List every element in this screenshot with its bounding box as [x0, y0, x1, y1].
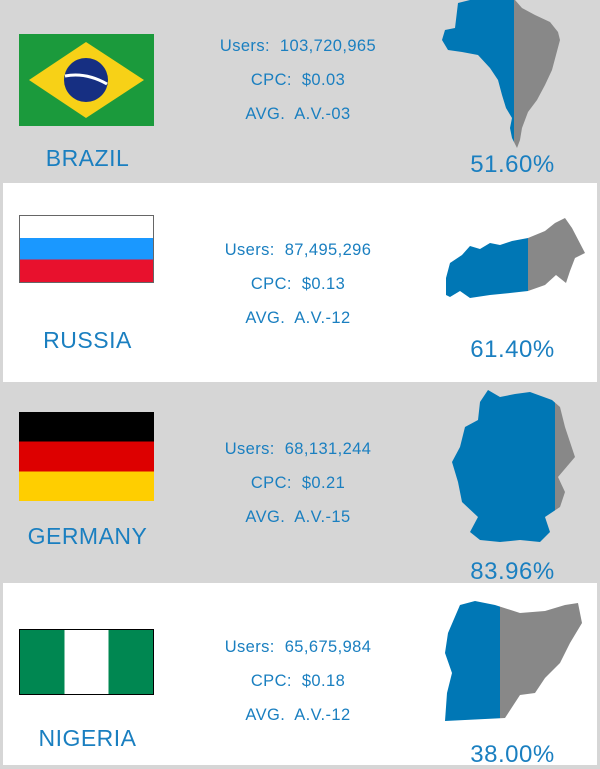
stats: brazil: CPC: $0.03	[251, 71, 345, 89]
name: russia: RUSSIA	[43, 327, 132, 353]
stats: russia: Users: 87,495,296	[225, 241, 371, 259]
stats: germany: Users: 68,131,244	[225, 440, 371, 458]
stats: russia: CPC: $0.13	[251, 275, 345, 293]
percentage: russia: 61.40%	[470, 336, 555, 363]
stats: russia: AVG. A.V.-12	[245, 309, 351, 327]
stats: germany: AVG. A.V.-15	[245, 508, 351, 526]
stats: brazil	[220, 37, 376, 123]
stats: germany	[225, 440, 371, 526]
percentage: nigeria: 38.00%	[470, 741, 555, 768]
stats: nigeria: CPC: $0.18	[251, 672, 345, 690]
stats: nigeria: Users: 65,675,984	[225, 638, 371, 656]
stats: nigeria	[225, 638, 371, 724]
stats: brazil: AVG. A.V.-03	[245, 105, 351, 123]
name: germany: GERMANY	[28, 523, 147, 549]
flag: brazil	[19, 34, 154, 126]
map: nigeria	[445, 601, 582, 721]
flag: russia	[19, 215, 154, 283]
map: germany	[452, 390, 575, 542]
panel: germany	[19, 390, 575, 585]
stats: nigeria: AVG. A.V.-12	[245, 706, 351, 724]
map: russia	[446, 218, 585, 298]
panel: brazil	[19, 0, 560, 178]
flag: nigeria	[19, 629, 154, 695]
name: nigeria: NIGERIA	[38, 725, 137, 751]
map: brazil	[442, 0, 560, 148]
percentage: brazil: 51.60%	[470, 151, 555, 178]
name: brazil: BRAZIL	[46, 145, 129, 171]
stats: brazil: Users: 103,720,965	[220, 37, 376, 55]
stats: germany: CPC: $0.21	[251, 474, 345, 492]
flag: germany	[19, 412, 154, 501]
panel: russia	[3, 183, 597, 382]
stats: russia	[225, 241, 371, 327]
panel: nigeria	[3, 583, 597, 765]
percentage: germany: 83.96%	[470, 558, 555, 585]
